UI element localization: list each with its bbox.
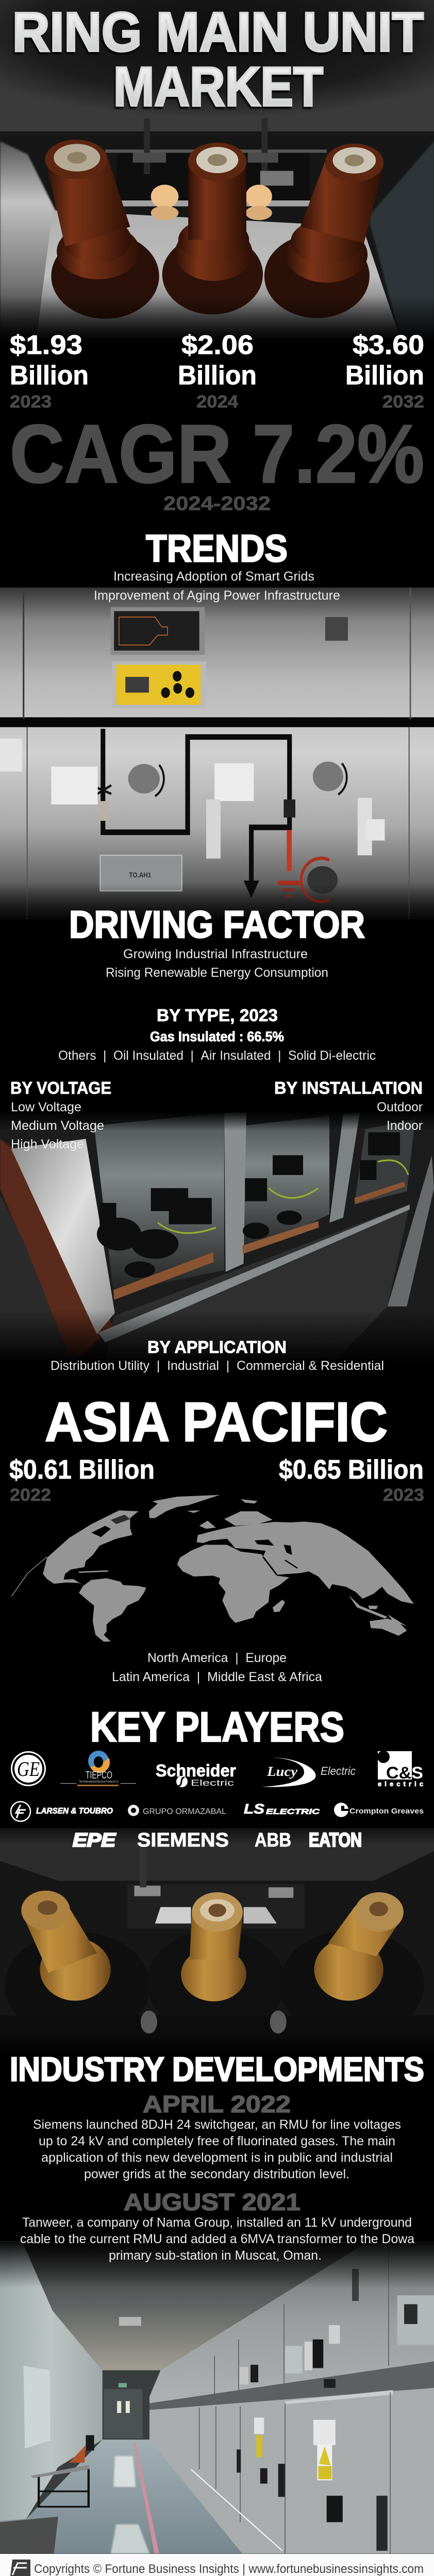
dark indicator [111,607,205,655]
April 2022 description: power grids at the secondary distribution level. [84,2167,349,2181]
by application [51,1337,384,1373]
copper busbars [113,1252,214,1300]
logo: TIEPCO: The International Electrical Products Co. [79,1781,119,1784]
single line diagram [103,729,290,882]
logo: C&S electric: electric [378,1780,423,1788]
right bushing [264,144,383,318]
logo: ABB: ABB [255,1829,291,1851]
market value 2024: Billion [178,361,257,391]
lower panels [149,2388,434,2554]
key players heading: KEY PLAYERS [90,1704,344,1751]
black insulators [97,1132,400,1278]
left bushing [45,140,159,319]
logo: Lucy Electric: Lucy [266,1764,298,1779]
by installation: BY INSTALLATION [274,1078,423,1097]
regions list: Latin America | Middle East & Africa [112,1670,322,1684]
logo: Larsen & Toubro [11,1802,113,1821]
icon: Fortune Business Insights logo [10,2560,30,2576]
logo: Larsen & Toubro: LARSEN & TOUBRO [36,1807,113,1816]
label TO.AH1 [100,855,182,891]
asia pacific 2022 value [9,1455,155,1505]
driving factor list [106,947,328,980]
logo: LS Electric: LS [244,1801,264,1817]
by voltage: Medium Voltage [11,1118,104,1133]
footer [0,2554,434,2576]
market value 2023: Billion [10,361,89,391]
August 2021 date: AUGUST 2021 [124,2189,301,2215]
by voltage: Low Voltage [11,1100,81,1114]
April 2022 description: application of this new development is in public and industrial [41,2150,393,2165]
by application: Distribution Utility | Industrial | Commercial & Residential [51,1359,384,1373]
asia pacific 2023 value: $0.65 Billion [279,1455,424,1485]
panel instruments [240,2269,434,2388]
cart and bench [0,2435,94,2554]
title: MARKET [113,55,323,117]
logo: GE [11,1751,46,1786]
market value 2024 [178,330,257,412]
driving factor list: Growing Industrial Infrastructure [123,947,308,961]
warning labels [237,2418,388,2551]
market value 2032 [345,330,424,412]
photo: switchgear front panel [0,587,434,919]
title [12,1,424,117]
logo: TIEPCO: TIEPCO [86,1770,112,1781]
by installation: Indoor [387,1118,423,1133]
white side panel [11,1139,115,1334]
regions list [112,1651,322,1684]
by installation [274,1078,423,1133]
logo: Lucy Electric [261,1757,356,1787]
asia pacific 2023 value [279,1455,424,1505]
by application: BY APPLICATION [147,1337,287,1357]
yellow voltage detector [112,662,206,708]
lower dark enclosure [110,1206,408,1341]
photo: ring main unit bushings (brown) [0,0,434,342]
logo: C&S electric: C&S [386,1764,423,1782]
logo: Schneider Electric: Electric [191,1778,235,1788]
left gold bushing [21,1891,111,2001]
regions list: North America | Europe [147,1651,287,1665]
market value 2023: $1.93 [10,330,82,360]
trends list: Increasing Adoption of Smart Grids [113,569,314,584]
door [104,2383,143,2438]
market value 2023: 2023 [10,392,52,412]
trends heading: TRENDS [146,527,288,570]
August 2021 description [20,2215,414,2263]
logo: GE: GE [17,1757,40,1781]
logo: Crompton Greaves [334,1803,424,1817]
April 2022 description [33,2117,401,2181]
black rings [5,1931,150,2040]
logo: Schneider Electric: Schneider [156,1761,236,1780]
logo: TIEPCO [60,1751,136,1786]
April 2022 description: up to 24 kV and completely free of fluorinated gases. The main [39,2134,395,2148]
logo: Siemens: SIEMENS [137,1829,229,1851]
photo: corridor of switchgear [0,2242,434,2554]
market value 2032: $3.60 [353,330,424,360]
logo: C&S electric [377,1751,423,1788]
key players logos [11,1751,424,1851]
driving factor heading: DRIVING FACTOR [69,903,365,946]
logo: LS Electric: ELECTRIC [266,1807,321,1816]
CAGR period: 2024-2032 [163,493,271,515]
April 2022 description: Siemens launched 8DJH 24 switchgear, an RMU for line voltages [33,2117,401,2132]
by voltage: BY VOLTAGE [10,1078,111,1097]
orange washers [151,184,178,208]
label TO.AH1: TO.AH1 [129,871,151,879]
August 2021 description: cable to the current RMU and added a 6MVA transformer to the Dowa [20,2232,414,2246]
trends list: Improvement of Aging Power Infrastructure [94,588,340,603]
right gold bushing [314,1892,404,2001]
world map globe [12,1495,415,1642]
market value 2023 [10,330,89,412]
market value 2024: $2.06 [181,330,254,360]
August 2021 description: primary sub-station in Muscat, Oman. [109,2248,322,2263]
logo: Crompton Greaves: Crompton Greaves [349,1807,424,1816]
logo: Grupo Ormazabal: GRUPO ORMAZABAL [143,1807,226,1816]
white boxes and openings [51,767,98,804]
by installation: Outdoor [377,1100,423,1114]
logo: Eaton: EATON [309,1829,362,1851]
market value 2032: 2032 [382,392,424,412]
by type values: Others | Oil Insulated | Air Insulated | Solid Di-electric [58,1048,376,1063]
photo: golden bushings [0,1828,434,2055]
by type values [58,1029,376,1063]
by type values: Gas Insulated : 66.5% [150,1029,284,1044]
photo: open switchgear with copper bars [0,1111,434,1364]
middle gold bushing [181,1892,246,2002]
logo: EPE: EPE [73,1829,116,1851]
by type heading: BY TYPE, 2023 [157,1006,278,1025]
market value 2032: Billion [345,361,424,391]
asia pacific heading: ASIA PACIFIC [45,1391,388,1453]
by voltage [10,1078,111,1151]
by voltage: High Voltage [11,1137,84,1151]
driving factor list: Rising Renewable Energy Consumption [106,965,328,980]
market value 2024: 2024 [196,392,238,412]
April 2022 date: APRIL 2022 [143,2091,291,2117]
centre bushing [162,143,263,314]
upper panels [149,2242,434,2403]
trends list [94,569,340,603]
asia pacific 2023 value: 2023 [383,1485,424,1505]
asia pacific 2022 value: 2022 [10,1485,51,1505]
logo: LS Electric [244,1801,321,1817]
logo: Lucy Electric: Electric [321,1765,356,1777]
asia pacific 2022 value: $0.61 Billion [9,1455,155,1485]
August 2021 description: Tanweer, a company of Nama Group, installed an 11 kV underground [22,2215,412,2230]
